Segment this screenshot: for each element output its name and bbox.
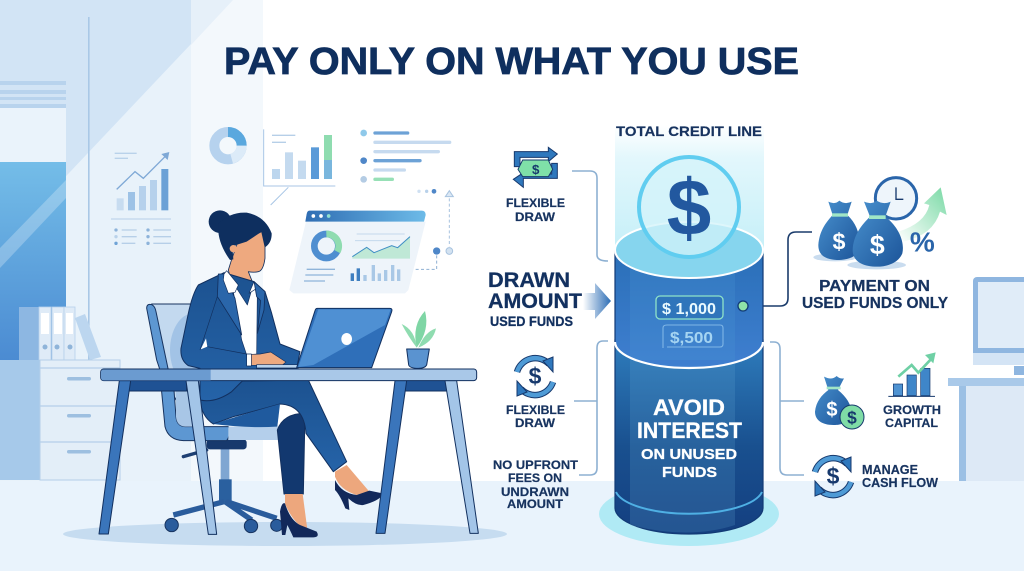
wall charts and dashboard [111,129,453,293]
amount: $1,000 [656,296,723,319]
laptop [257,308,392,368]
drawn amount label: DRAWN [488,269,570,292]
legend list [360,130,451,183]
icon: clock [875,178,917,219]
label: FLEXIBLE [506,196,565,210]
cylinder lower section [615,340,763,534]
hair [209,210,272,260]
icon: circular dollar arrows: $ [529,363,542,389]
high heel shoes [280,480,383,537]
icon: percent: % [910,226,935,257]
label: DRAW [515,210,556,224]
label: FLEXIBLE [506,403,565,417]
icon: cash exchange: $ [532,162,540,177]
drawn amount label [488,269,582,329]
no upfront fees label [493,458,579,511]
chart: bar chart board [264,129,335,205]
base glow [599,482,779,546]
floor shadow [63,522,507,546]
chart: wall line and bars [111,152,171,245]
label [802,278,949,312]
no upfront fees label: FEES ON [508,471,562,485]
avoid interest text: ON UNUSED [641,446,737,463]
filing cabinet with binders [0,307,120,480]
label: GROWTH [883,403,941,417]
avoid interest text: INTEREST [637,418,743,443]
avoid interest text: AVOID [653,395,725,420]
icon: growth bars [888,352,936,396]
amount: $1,000: $ 1,000 [662,301,716,318]
section divider [615,342,763,368]
flow connector [413,189,453,269]
cylinder upper section [615,250,763,368]
no upfront fees label: UNDRAWN [501,485,569,499]
avoid interest text [637,395,743,481]
label: CASH FLOW [862,476,938,490]
title: PAY ONLY ON WHAT YOU USE [224,41,799,83]
icon: money bag with coin: $ [847,407,857,427]
office chair [147,304,283,533]
right side monitor and desk [948,277,1024,481]
icon: money bag with coin: $ [826,399,838,421]
avoid interest text: FUNDS [662,464,717,481]
label [883,403,941,430]
light column [615,125,764,255]
icon: money bags: $ [870,230,885,260]
label [506,196,565,224]
total credit line label: TOTAL CREDIT LINE [616,123,762,139]
neck and face [228,232,265,305]
credit line cylinder [599,123,779,546]
label [506,403,565,430]
connector lines [572,171,812,475]
lapels [217,274,265,335]
payment on used funds item [802,178,949,312]
chart: donut [214,132,242,159]
drawn amount label: AMOUNT [488,290,582,313]
manage cash flow item [815,457,938,496]
teal base ring [616,492,762,514]
flexible draw lower item [506,357,565,430]
white shirt [226,272,257,355]
label: DRAW [515,416,556,430]
flexible draw top item [506,147,565,224]
drawn amount label: USED FUNDS [490,314,573,329]
hands and cuff [247,352,286,366]
dollar coin: $ [667,163,711,252]
arrow into cylinder [583,283,611,319]
icon: growth arrow [898,187,947,242]
no upfront fees label: NO UPFRONT [493,458,579,472]
pants and legs [200,380,369,529]
collar [223,271,255,293]
label [862,463,938,490]
icon: money bag with coin [815,376,864,429]
dashboard panel [289,211,426,293]
cylinder top [615,222,763,278]
growth capital item [815,352,941,430]
dollar coin [639,157,739,257]
no upfront fees label: AMOUNT [507,497,564,511]
amount: $500: $,500 [670,330,713,347]
jacket [181,273,300,401]
label: USED FUNDS ONLY [802,295,949,312]
icon: cash flow arrows: $ [827,463,840,489]
amount: $500 [663,325,723,348]
icon: money bags [813,201,906,269]
potted plant [402,311,436,368]
drawn marker dot [738,301,748,311]
desk [99,369,478,534]
woman working at desk [99,210,478,537]
label: MANAGE [862,463,918,477]
label: CAPITAL [885,416,938,430]
label: PAYMENT ON [819,278,930,295]
icon: money bags: $ [833,228,846,254]
